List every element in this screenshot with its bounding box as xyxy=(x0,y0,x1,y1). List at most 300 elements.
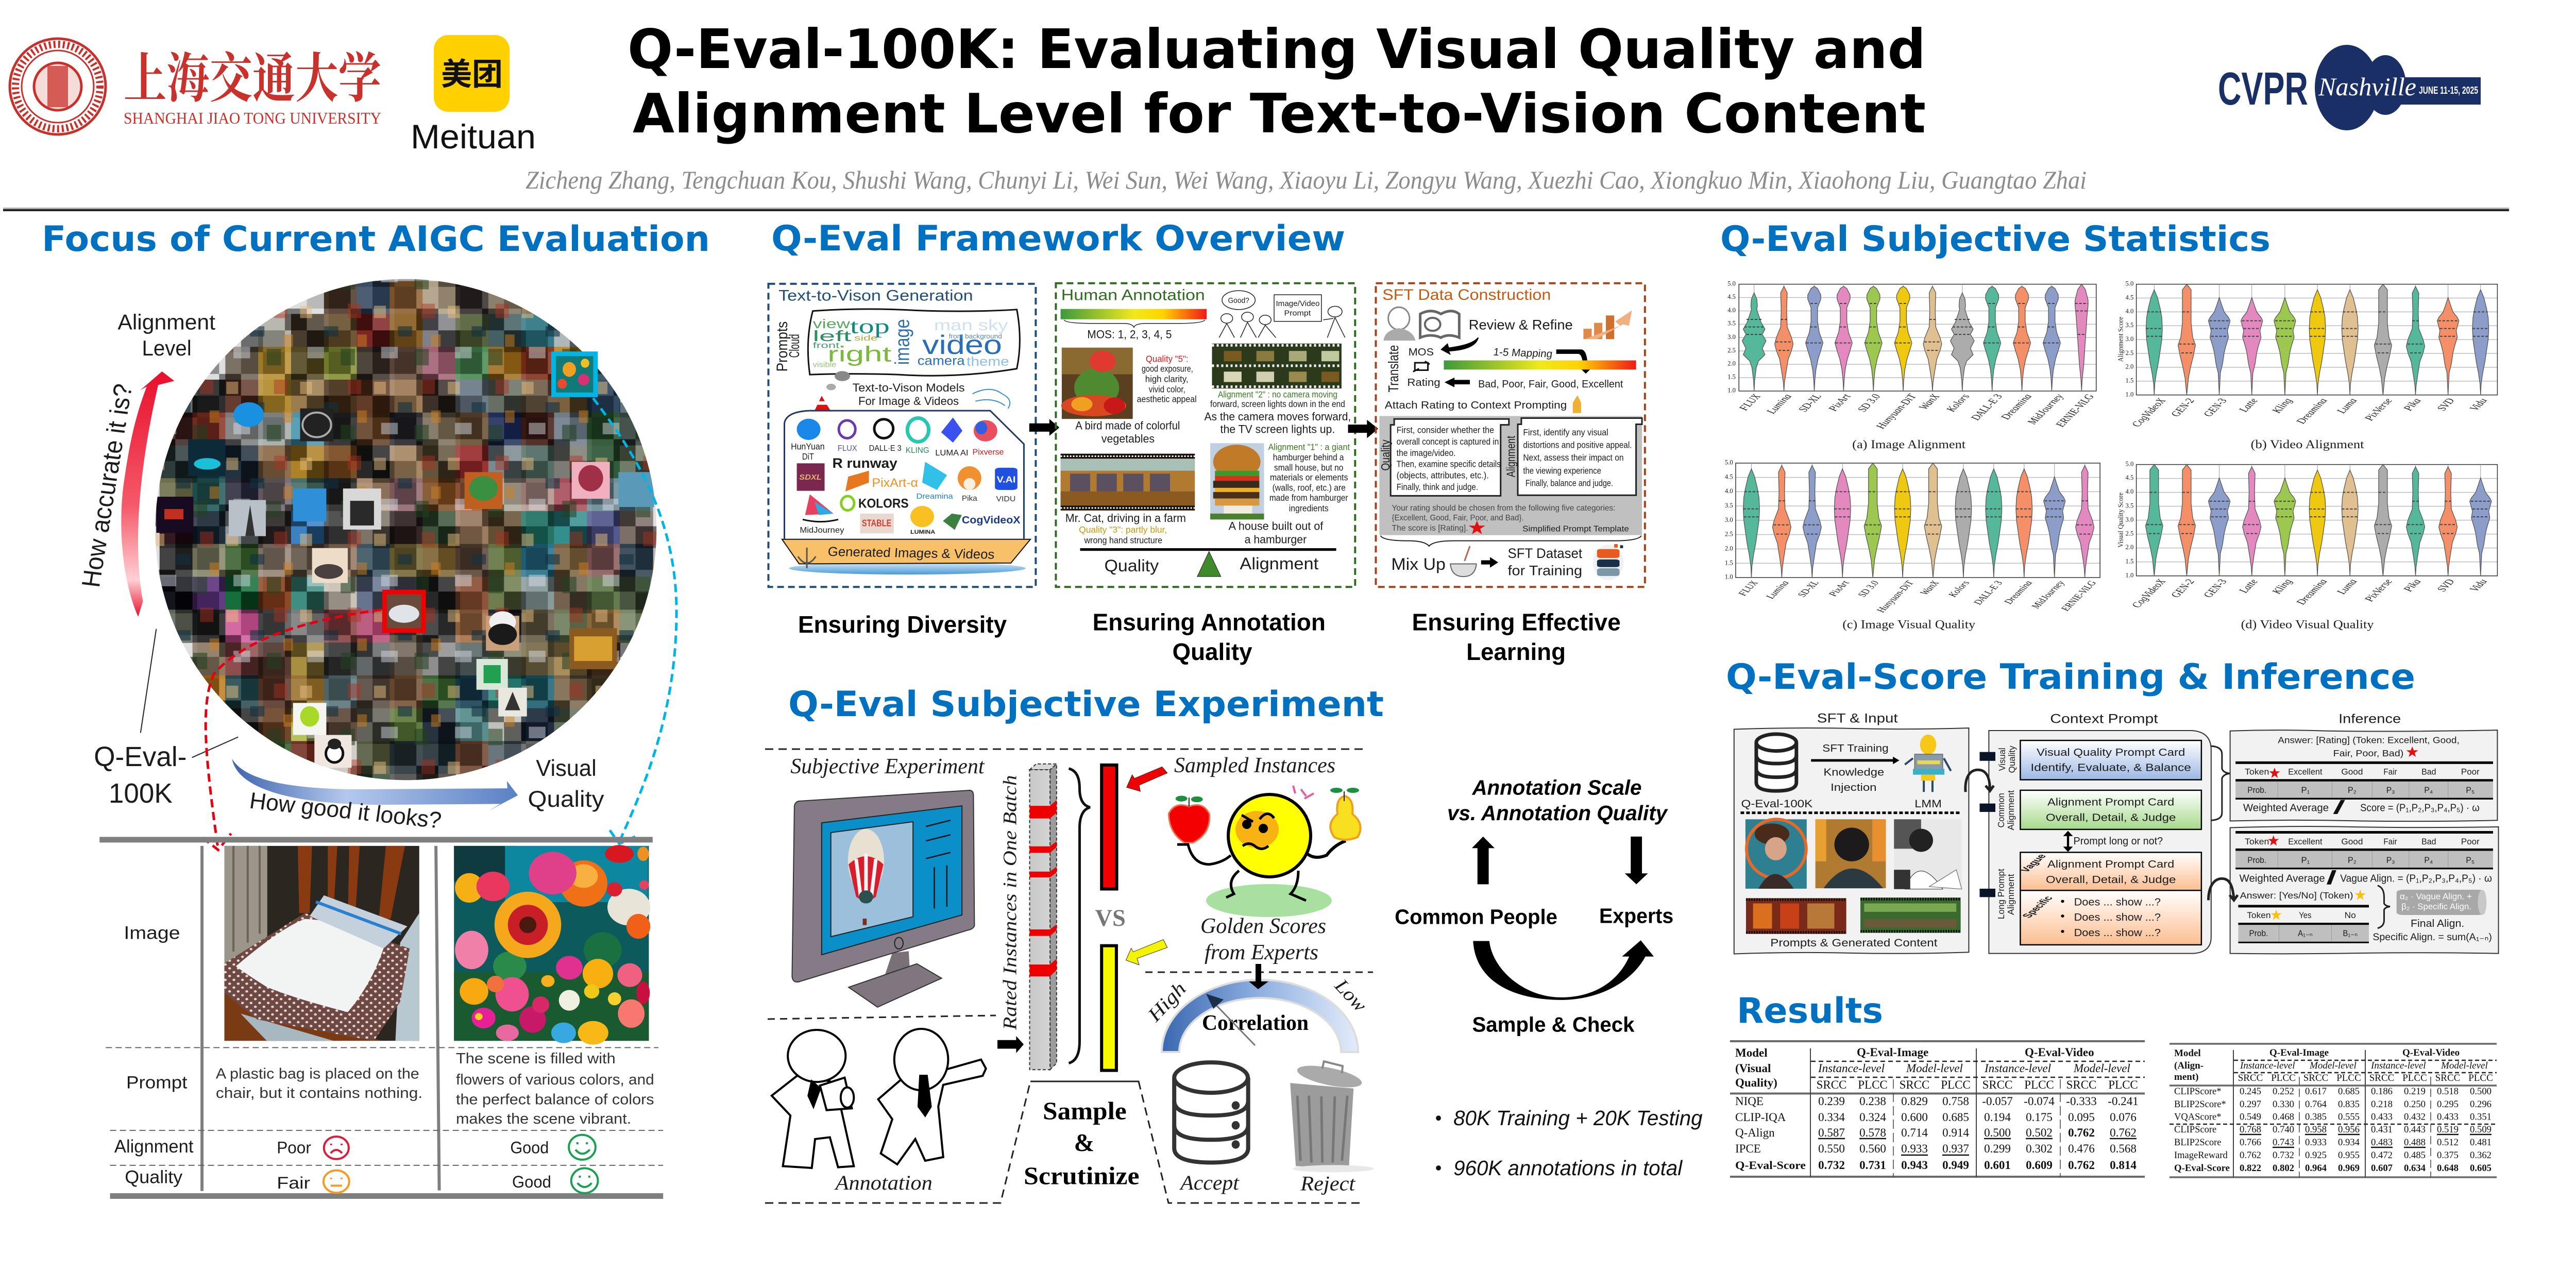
table: alignment results: 0.934 xyxy=(2338,1137,2360,1148)
table: visual quality results: 0.758 xyxy=(1942,1095,1969,1108)
rating: poor alignment xyxy=(277,1137,349,1159)
panel: SFT data construction: SFT Data Construction xyxy=(1382,286,1551,303)
table: alignment results: 0.964 xyxy=(2305,1163,2327,1174)
chart b: video alignment: Vidu xyxy=(2467,397,2490,412)
chart d: video visual quality: 2.0 xyxy=(2126,544,2133,551)
chart c: image visual quality: DALL-E 3 xyxy=(1970,580,2005,606)
framework overview: made from hamburger xyxy=(1269,493,1348,503)
panel: SFT and input: Q-Eval-100K xyxy=(1741,798,1813,810)
prompt template: Finally, think and judge. xyxy=(1397,482,1478,492)
chart c: image visual quality: SD-XL xyxy=(1795,580,1821,598)
header xyxy=(3,18,2509,211)
table: alignment results: PLCC xyxy=(2402,1073,2427,1083)
table: visual quality results: 0.933 xyxy=(1901,1142,1928,1155)
word cloud: man sky xyxy=(934,316,1008,334)
boat with model logos: LUMA AI xyxy=(935,448,969,457)
prompt template: {Excellent, Good, Fair, Poor, and Bad}. xyxy=(1392,513,1523,522)
panel: alignment inference: Prob. xyxy=(2247,855,2266,865)
row labels xyxy=(114,923,193,1187)
table: visual quality results: Quality) xyxy=(1735,1076,1777,1089)
framework overview xyxy=(768,283,1645,665)
icon: quality and alignment balance: Alignment xyxy=(1240,554,1318,573)
prompt text: right xyxy=(456,1050,654,1127)
boat with model logos: R runway xyxy=(832,455,897,471)
panel: human annotation: Alignment "2" : no camera moving xyxy=(1218,389,1337,399)
chart d: video visual quality: PixVerse xyxy=(2361,578,2396,603)
alignment 1 note: ingredients xyxy=(1289,503,1329,513)
prompt: bird xyxy=(1075,419,1180,445)
table: alignment results: Instance-level xyxy=(2240,1060,2295,1071)
panel: human annotation: hamburger behind a xyxy=(1273,452,1344,462)
panel: alignment inference: B₁₋ₙ xyxy=(2343,928,2358,938)
table: alignment results: 0.500 xyxy=(2470,1086,2492,1097)
label: sample and scrutinize: Sample xyxy=(1043,1097,1127,1125)
prompt text: right: The scene is filled with xyxy=(456,1050,616,1067)
prompt template: the viewing experience xyxy=(1523,466,1601,476)
chart d: video visual quality: 4.0 xyxy=(2126,488,2133,495)
panel: SFT and input: LMM xyxy=(1914,798,1942,810)
icon: glue bottle xyxy=(1573,395,1581,413)
icon: audience and presenter: Prompt xyxy=(1284,309,1311,317)
arrow: SFT training xyxy=(1811,742,1900,793)
authors: Zicheng Zhang, Tengchuan Kou, Shushi Wang, Chunyi Li, Wei Sun, Wei Wang, Xiaoyu Li, Zongyu Wang, Xuezhi Cao, Xiongkuo Min, Xiaohong Liu, Guangtao Zhai xyxy=(526,165,2087,194)
arrow: annotation to SFT xyxy=(1348,420,1378,438)
row labels: Prompt xyxy=(126,1072,188,1092)
chart a: image alignment: Kolors xyxy=(1943,393,1973,413)
table: alignment results: SRCC xyxy=(2369,1073,2394,1083)
table: visual quality results: 0.502 xyxy=(2026,1126,2053,1139)
table: visual quality results: 0.095 xyxy=(2068,1111,2095,1124)
boat with model logos: MidJourney xyxy=(800,526,844,535)
prompt text: right: flowers of various colors, and xyxy=(456,1072,654,1088)
table: alignment results: 0.822 xyxy=(2240,1163,2261,1174)
boat with model logos: Generated Images & Videos xyxy=(827,545,995,562)
row labels: Quality xyxy=(125,1167,182,1187)
framework overview: Alignment "1" : a giant xyxy=(1268,442,1350,452)
film strip: green vegetables xyxy=(1860,897,1961,933)
table: visual quality results: -0.074 xyxy=(2024,1095,2055,1108)
chart b: video alignment: 4.5 xyxy=(2126,294,2133,301)
label: Alignment Level xyxy=(117,310,215,360)
panel: human annotation: good exposure, xyxy=(1142,364,1193,374)
arrow: SFT training: Injection xyxy=(1831,782,1877,793)
heading: Q-Eval Subjective Experiment: Q-Eval Subjective Experiment xyxy=(788,684,1384,725)
card: vague alignment: Alignment Prompt Card xyxy=(2047,858,2174,870)
panel: rating inference: Excellent xyxy=(2288,767,2323,776)
label: annotation: Annotation xyxy=(834,1172,933,1195)
heading: Results: Results xyxy=(1737,991,1883,1031)
chart c: image visual quality: 4.5 xyxy=(1725,473,1733,480)
table: visual quality results: 0.762 xyxy=(2068,1126,2095,1139)
table: alignment results: 0.468 xyxy=(2273,1112,2294,1122)
table: visual quality results: Q-Eval-Score xyxy=(1735,1159,1806,1172)
panel: rating inference: P₄ xyxy=(2424,785,2433,795)
chart d: video visual quality xyxy=(2117,461,2497,631)
panel: alignment inference: P₄ xyxy=(2424,855,2433,865)
character xyxy=(1226,786,1346,901)
chart a: image alignment: 3.0 xyxy=(1727,334,1736,341)
label: rated instances: Rated Instances in One Batch xyxy=(999,775,1021,1030)
panel: SFT and input: SFT Training xyxy=(1822,742,1889,754)
table: alignment results: 0.743 xyxy=(2273,1137,2294,1148)
panel: context prompt: Alignment xyxy=(2006,790,2016,830)
table: visual quality results: Instance-level xyxy=(1818,1062,1885,1075)
logo: Meituan: 美团 xyxy=(441,57,503,92)
chart d: video visual quality: GEN-2 xyxy=(2168,578,2198,599)
chart a: image alignment: Lumina xyxy=(1764,393,1795,415)
table: alignment results: 0.362 xyxy=(2470,1150,2492,1161)
batch column xyxy=(1030,764,1057,1070)
label: common people: Common People xyxy=(1395,906,1557,929)
table: alignment results: ImageReward xyxy=(2174,1150,2228,1161)
image: black cat xyxy=(1816,819,1886,888)
arrow: sampled instances xyxy=(1127,767,1167,791)
icon: wave xyxy=(973,389,1010,409)
prompt: TV xyxy=(1205,411,1351,436)
word cloud: image xyxy=(891,319,914,365)
table: visual quality results: 0.175 xyxy=(2026,1111,2053,1124)
prompt text: left: chair, but it contains nothing. xyxy=(216,1085,422,1101)
arrow: visual quality axis xyxy=(232,759,518,811)
panel: SFT data construction: distortions and positive appeal. xyxy=(1523,440,1632,450)
table: alignment results: 0.519 xyxy=(2437,1124,2459,1135)
arrow: sample and check loop xyxy=(1473,940,1654,1000)
panel: rating inference: P₅ xyxy=(2466,785,2475,795)
table: visual quality results: 0.476 xyxy=(2068,1142,2095,1155)
chart a: image alignment: 3.5 xyxy=(1727,320,1736,327)
correlation gauge: Low xyxy=(1330,975,1371,1016)
table: alignment results: 0.433 xyxy=(2437,1112,2459,1122)
icon: audience and presenter xyxy=(1219,291,1345,337)
label: sample and scrutinize: Scrutinize xyxy=(1024,1162,1140,1190)
table: alignment results: 0.925 xyxy=(2305,1150,2327,1161)
chart c: image visual quality: FLUX xyxy=(1735,580,1761,597)
mapping diagram: Translate xyxy=(1385,345,1401,393)
table: alignment results: 0.549 xyxy=(2240,1112,2261,1122)
panel: human annotation: A house built out of xyxy=(1229,520,1324,532)
mix up to SFT dataset: for Training xyxy=(1507,563,1582,578)
boat with model logos: DiT xyxy=(802,451,814,462)
table: alignment results: 0.295 xyxy=(2437,1099,2459,1110)
chart b: video alignment: 5.0 xyxy=(2126,280,2133,287)
icon: monitor with balloon xyxy=(792,790,974,1007)
chart d: video visual quality: 3.5 xyxy=(2126,502,2133,509)
panel: alignment inference: β₂ · Specific Align. xyxy=(2401,902,2471,911)
table: alignment results: Model-level xyxy=(2309,1060,2357,1071)
chart b: video alignment: 3.0 xyxy=(2126,335,2133,343)
title xyxy=(628,18,1926,145)
boat with model logos: PixArt-α xyxy=(872,476,918,490)
card: common alignment xyxy=(2020,790,2201,829)
panel: rating inference: Poor xyxy=(2461,767,2480,776)
panel: alignment inference: Good xyxy=(2341,837,2363,846)
panel: human annotation: materials or elements xyxy=(1270,472,1348,482)
chart d: video visual quality: 5.0 xyxy=(2126,461,2133,467)
chart b: video alignment: SVD xyxy=(2434,397,2458,412)
chart b: video alignment: 2.0 xyxy=(2126,363,2133,370)
MOS scale xyxy=(1061,309,1207,341)
label: golden scores from experts: Golden Scores xyxy=(1200,914,1326,938)
boat with model logos: V.AI xyxy=(997,474,1015,484)
boat with model logos: Pika xyxy=(962,494,977,502)
chart a: image alignment: Dreamina xyxy=(1998,393,2035,421)
table: visual quality results: 0.076 xyxy=(2110,1111,2137,1124)
dataset bullet: annotations: 960K annotations in total xyxy=(1453,1157,1683,1180)
table: alignment results: 0.483 xyxy=(2371,1137,2393,1148)
table: alignment results: 0.432 xyxy=(2404,1112,2426,1122)
image: hamburger house xyxy=(1210,443,1264,519)
panel: alignment inference: Token xyxy=(2245,837,2269,846)
table: visual quality results: 0.609 xyxy=(2026,1159,2053,1172)
final alignment box: Final Align. xyxy=(2411,918,2464,929)
table: visual quality results: SRCC xyxy=(1900,1078,1929,1091)
table: alignment results: Q-Eval-Video xyxy=(2402,1047,2460,1058)
table: visual quality results: PLCC xyxy=(2108,1078,2138,1091)
chart d: video visual quality: Vidu xyxy=(2467,578,2490,592)
panel: human annotation: small house, but no xyxy=(1274,463,1343,472)
table: alignment results: 0.330 xyxy=(2273,1099,2294,1110)
panel: alignment inference: Fair xyxy=(2383,837,2397,846)
panel: SFT and input: Prompts & Generated Content xyxy=(1770,937,1938,949)
panel: alignment inference: No xyxy=(2345,910,2356,920)
label: golden scores from experts: from Experts xyxy=(1205,941,1318,964)
boat with model logos: STABLE xyxy=(862,518,891,529)
panel: rating inference: P₁ xyxy=(2301,785,2310,795)
chart d: video visual quality: 3.0 xyxy=(2126,516,2133,523)
word cloud xyxy=(808,309,1020,376)
logo: CVPR Nashville xyxy=(2218,45,2481,130)
ground shadow xyxy=(1206,884,1332,917)
table: alignment results: PLCC xyxy=(2468,1073,2493,1083)
arrow: golden scores xyxy=(1126,940,1167,965)
logo: CVPR Nashville: Nashville xyxy=(2318,72,2416,101)
word cloud: camera xyxy=(918,354,965,368)
chart d: video visual quality: 4.5 xyxy=(2126,474,2133,481)
quality 5 note: vivid color, xyxy=(1149,384,1185,394)
icon: database xyxy=(1756,734,1797,791)
panel: context prompt: Visual xyxy=(1997,748,2007,771)
arrow: annotators to batch xyxy=(997,1036,1024,1053)
table: visual quality results: 0.762 xyxy=(2068,1159,2095,1172)
panel: rating inference xyxy=(2230,730,2497,821)
caption: ensuring annotation quality xyxy=(1093,609,1326,665)
table: alignment results: CLIPScore xyxy=(2174,1125,2216,1135)
label: Visual Quality: Visual xyxy=(536,756,597,781)
table: visual quality results: 0.324 xyxy=(1859,1111,1886,1124)
chart b: video alignment: Pika xyxy=(2400,397,2425,412)
table: alignment results: Q-Eval-Image xyxy=(2269,1047,2329,1058)
table: alignment results: 0.762 xyxy=(2240,1150,2261,1161)
panel: violin charts xyxy=(1725,280,2497,631)
chart d: video visual quality: Luma xyxy=(2334,578,2360,596)
chart a: image alignment: 5.0 xyxy=(1727,280,1736,287)
chart d: video visual quality: 1.5 xyxy=(2126,558,2133,565)
golden scores character and gauge xyxy=(1143,754,1371,1052)
label: Visual Quality: Quality xyxy=(528,786,604,812)
card: specific alignment xyxy=(2020,890,2201,945)
chart a: image alignment: SD-XL xyxy=(1795,393,1825,413)
icon: audience and presenter: Good? xyxy=(1228,296,1249,304)
word cloud: visible xyxy=(813,360,837,369)
table: visual quality results: PLCC xyxy=(1858,1078,1888,1091)
mosaic of generated images xyxy=(152,275,662,807)
chart a: image alignment: MidJourney xyxy=(2024,393,2066,426)
panel: alignment inference: P₁ xyxy=(2301,855,2310,865)
panel: example comparison table xyxy=(99,840,663,1196)
panel: alignment inference: P₃ xyxy=(2386,855,2395,865)
boat with model logos: KOLORS xyxy=(858,496,909,511)
table: visual quality results: 0.601 xyxy=(1984,1159,2011,1172)
label: Q-Eval-100K: Q-Eval- xyxy=(94,741,187,772)
table: alignment results: 0.634 xyxy=(2404,1163,2426,1174)
chart a: image alignment: 4.5 xyxy=(1727,294,1736,300)
icon: reader and book xyxy=(1383,307,1459,341)
card: specific alignment: Specific xyxy=(2020,895,2057,919)
word cloud: right xyxy=(827,342,891,366)
rating: fair quality: Fair xyxy=(277,1174,310,1193)
chart c: image visual quality: WanX xyxy=(1917,580,1942,596)
label: attach rating: Attach Rating to Context Prompting xyxy=(1385,399,1567,411)
word cloud: view xyxy=(813,317,850,331)
dataset bullet: training and testing: 80K Training + 20K Testing xyxy=(1453,1107,1703,1130)
table: visual quality results: CLIP-IQA xyxy=(1735,1111,1786,1124)
table: visual quality results: 0.560 xyxy=(1859,1142,1886,1155)
table: alignment results: 0.969 xyxy=(2338,1163,2360,1174)
chart a: image alignment: 1.0 xyxy=(1727,387,1736,394)
table: alignment results: 0.245 xyxy=(2240,1086,2261,1097)
label: VS: VS xyxy=(1095,905,1126,931)
logo: CVPR Nashville: JUNE 11-15, 2025 xyxy=(2419,85,2478,96)
boat with model logos: FLUX xyxy=(838,444,857,453)
experiment right part xyxy=(1290,776,1703,1195)
panel: alignment inference: Bad xyxy=(2421,837,2436,846)
panel: rating inference: Fair, Poor, Bad) xyxy=(2333,748,2403,758)
prompt: bird: vegetables xyxy=(1101,433,1155,445)
table: alignment results: PLCC xyxy=(2336,1073,2361,1083)
table: alignment results: 0.485 xyxy=(2404,1150,2426,1161)
table: visual quality results: Model xyxy=(1735,1046,1768,1059)
chart b: video alignment: GEN-2 xyxy=(2168,397,2198,418)
icon: pear xyxy=(1330,788,1361,840)
table: visual quality results: 0.937 xyxy=(1942,1142,1969,1155)
table: alignment results: 0.443 xyxy=(2404,1124,2426,1135)
label: sample and scrutinize: & xyxy=(1074,1129,1094,1157)
icon: LMM robot xyxy=(1905,735,1951,792)
icon: rising bars xyxy=(1583,311,1632,339)
table: visual quality results: 0.334 xyxy=(1818,1111,1845,1124)
panel: alignment inference xyxy=(2230,826,2499,954)
icon: apple xyxy=(1168,795,1231,865)
panel: context prompt: Prompt long or not? xyxy=(2074,835,2163,847)
table: alignment results: 0.617 xyxy=(2305,1086,2327,1097)
table: visual quality results: Q-Eval-Video xyxy=(2025,1046,2094,1059)
panel: alignment inference: A₁₋ₙ xyxy=(2298,928,2313,938)
chart b: video alignment: 4.0 xyxy=(2126,308,2133,315)
table: alignment results: 0.385 xyxy=(2305,1112,2327,1122)
table: alignment results: 0.252 xyxy=(2273,1086,2294,1097)
table: visual quality results xyxy=(1730,1041,2145,1177)
label: annotation scale vs quality: vs. Annotation Quality xyxy=(1447,802,1668,825)
label: How good it looks?: How good it looks? xyxy=(248,788,443,834)
prompt text: left xyxy=(216,1065,422,1101)
column headers: Context Prompt xyxy=(2050,711,2158,726)
framework overview: As the camera moves forward, xyxy=(1205,411,1351,423)
chart a: image alignment: ERNIE-ViLG xyxy=(2053,393,2097,428)
panel: rating inference: Token xyxy=(2245,767,2269,776)
table: visual quality results: 0.239 xyxy=(1818,1095,1845,1108)
table: alignment results: 0.431 xyxy=(2371,1124,2393,1135)
label: models xyxy=(852,382,965,408)
chart c: image visual quality: (c) Image Visual Quality xyxy=(1842,618,1975,631)
table: alignment results: PLCC xyxy=(2271,1073,2296,1083)
label: models: For Image & Videos xyxy=(858,395,959,408)
caption: ensuring annotation quality: Ensuring Annotation xyxy=(1093,609,1326,636)
arrow: cyan dashed link to good example xyxy=(593,398,676,844)
table: visual quality results: 0.238 xyxy=(1859,1095,1886,1108)
table: visual quality results: -0.057 xyxy=(1982,1095,2013,1108)
prompt and quality 3 note: Quality "3": partly blur, xyxy=(1079,524,1167,535)
title: Q-Eval-100K: Evaluating Visual Quality and xyxy=(628,18,1926,81)
arrow: down to quality xyxy=(1625,837,1648,884)
card: common alignment: Overall, Detail, & Judge xyxy=(2046,812,2176,823)
boat with model logos xyxy=(782,396,1030,574)
label: prompts cloud: Prompts xyxy=(774,321,791,371)
chart d: video visual quality: SVD xyxy=(2434,578,2458,592)
panel: SFT data construction xyxy=(1376,283,1645,587)
logo: Meituan xyxy=(411,35,536,156)
card: visual quality xyxy=(2020,740,2201,779)
table: alignment results: 0.732 xyxy=(2273,1150,2294,1161)
chart d: video visual quality: Visual Quality Score xyxy=(2117,493,2125,548)
word cloud: front xyxy=(813,341,839,350)
logo: CVPR Nashville: CVPR xyxy=(2218,63,2308,115)
panel: SFT and input xyxy=(1734,728,1969,954)
image: sketch of person xyxy=(1894,819,1962,889)
image: vegetable bird xyxy=(1061,348,1133,419)
label: Visual Quality xyxy=(528,756,604,812)
alignment 1 note xyxy=(1268,442,1350,513)
prompt text: left: A plastic bag is placed on the xyxy=(216,1065,419,1082)
label: Q-Eval-100K: 100K xyxy=(109,778,173,809)
prompt text: right: makes the scene vibrant. xyxy=(456,1111,631,1127)
table: visual quality results: 0.568 xyxy=(2110,1142,2137,1155)
table: alignment results: 0.835 xyxy=(2338,1099,2360,1110)
red sampled bar xyxy=(1101,765,1117,889)
chart b: video alignment: 2.5 xyxy=(2126,349,2133,356)
alignment 2 note xyxy=(1210,389,1345,409)
word cloud: front background xyxy=(949,333,1002,340)
panel: rating inference: P₂ xyxy=(2348,785,2357,795)
table: visual quality results: NIQE xyxy=(1735,1095,1764,1108)
panel: human annotation: Mr. Cat, driving in a farm xyxy=(1065,512,1186,524)
card: common alignment: Alignment Prompt Card xyxy=(2047,796,2174,808)
table: alignment results: 0.764 xyxy=(2305,1099,2327,1110)
chart c: image visual quality: MidJourney xyxy=(2028,580,2067,610)
panel: alignment inference: P₅ xyxy=(2466,855,2475,865)
label: sampled instances: Sampled Instances xyxy=(1174,754,1335,777)
table: alignment results: 0.958 xyxy=(2305,1124,2327,1135)
correlation gauge xyxy=(1143,964,1371,1052)
table: alignment results: Instance-level xyxy=(2370,1060,2426,1071)
table: alignment results: 0.802 xyxy=(2273,1163,2294,1174)
table: alignment results: SRCC xyxy=(2238,1073,2263,1083)
table: visual quality results: 0.829 xyxy=(1901,1095,1928,1108)
label: accept: Accept xyxy=(1179,1172,1240,1195)
panel: rating inference: Weighted Average xyxy=(2243,802,2329,814)
table: visual quality results: 0.302 xyxy=(2026,1142,2053,1155)
table: visual quality results: 0.600 xyxy=(1901,1111,1928,1124)
table: visual quality results: 0.587 xyxy=(1818,1126,1845,1139)
